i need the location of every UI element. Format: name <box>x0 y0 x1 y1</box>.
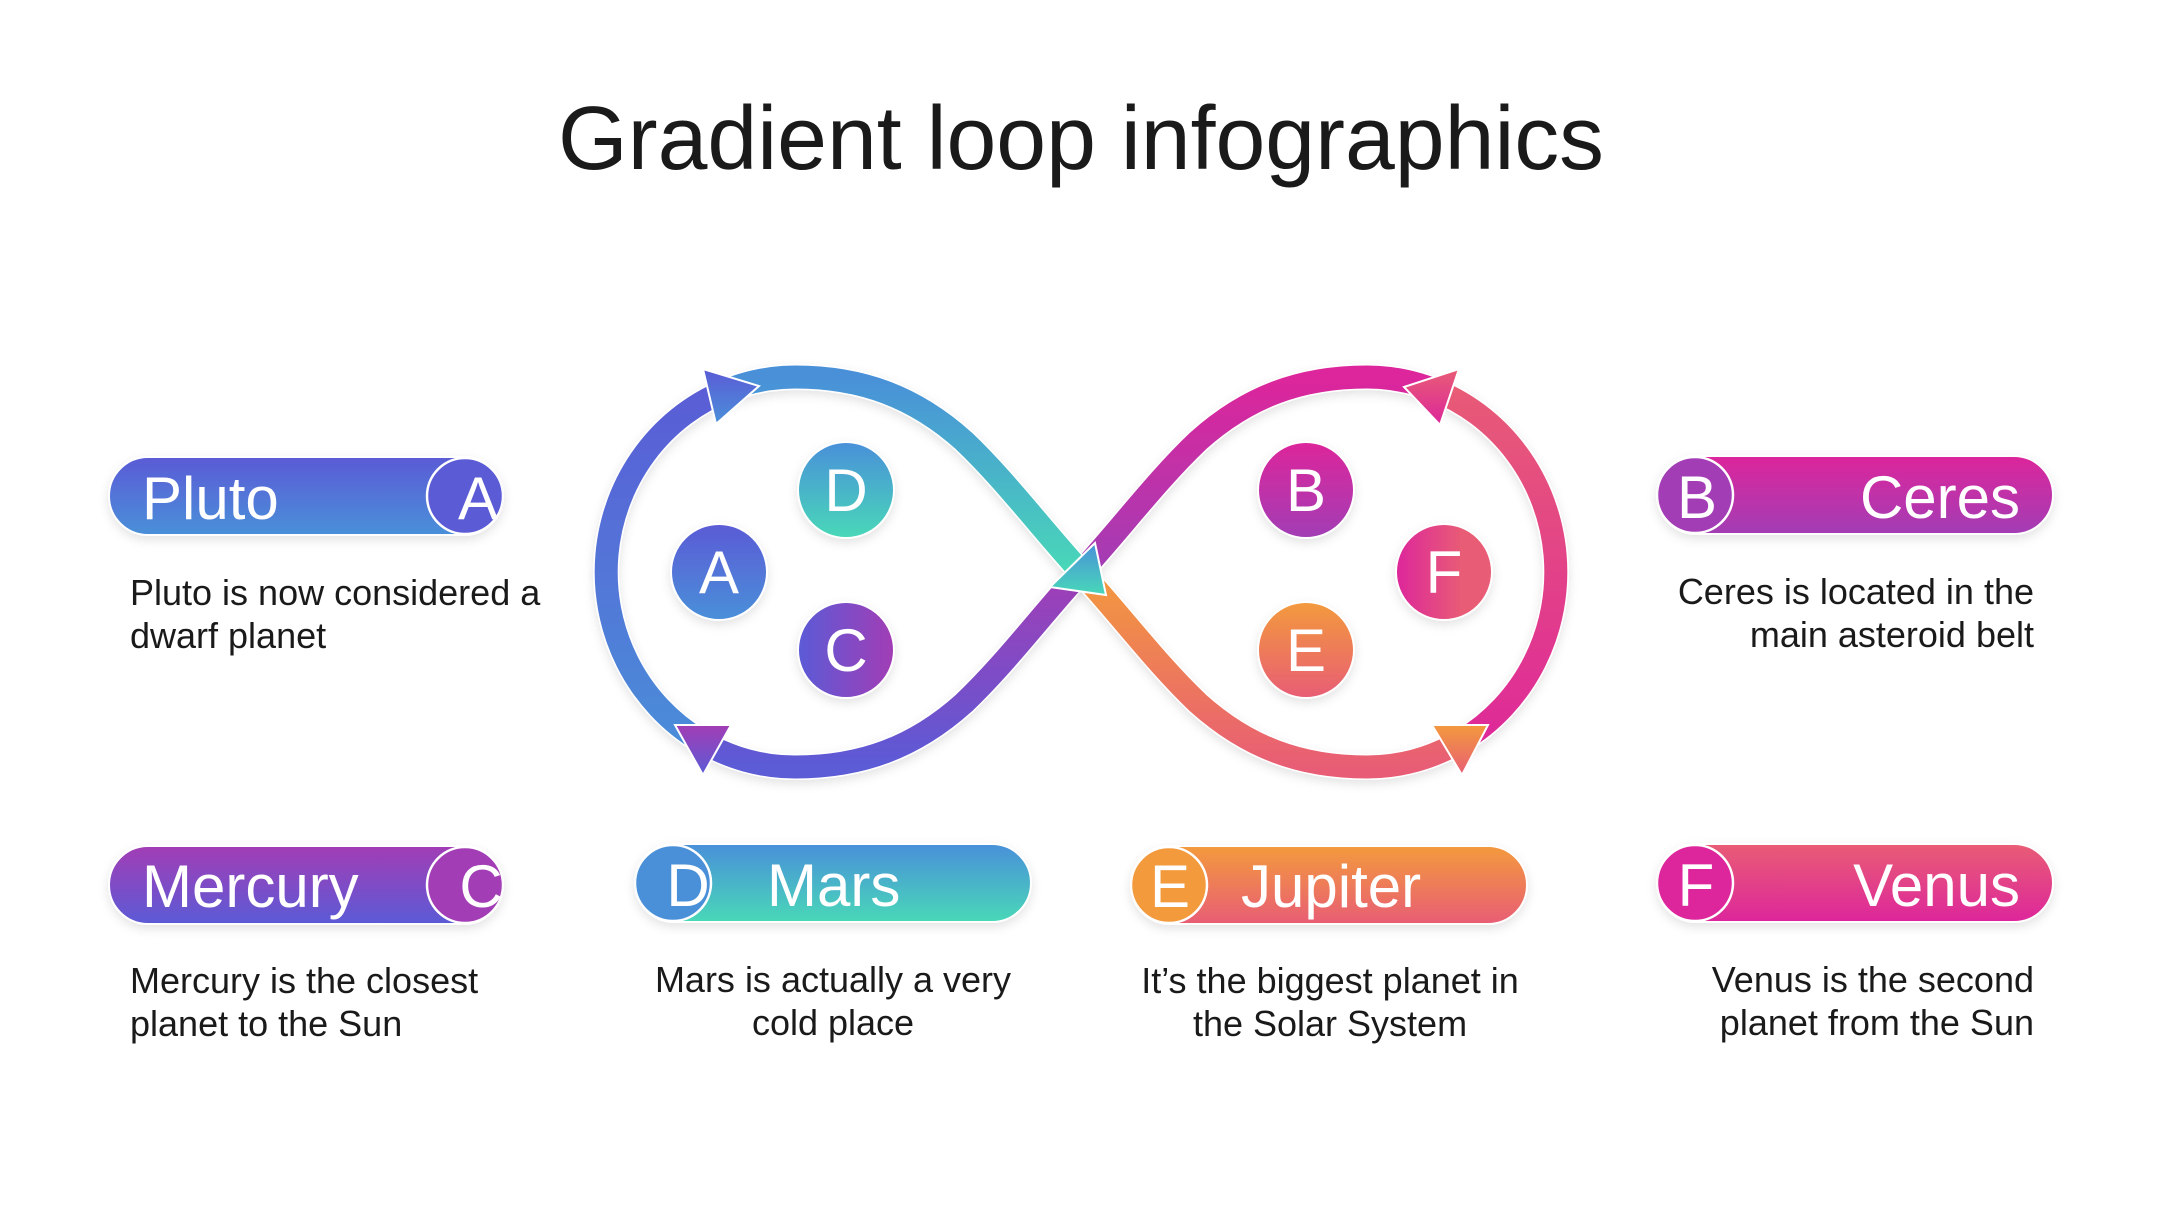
description: Venus: Venus is the second <box>1712 959 2034 1000</box>
pill: Ceres: Ceres <box>1860 464 2020 531</box>
pill: Pluto <box>109 457 503 535</box>
description: Pluto: Pluto is now considered a <box>130 572 541 613</box>
description: Venus: planet from the Sun <box>1720 1002 2034 1043</box>
panel: Jupiter <box>1131 846 1527 1044</box>
circle C <box>798 602 894 698</box>
loop segment: top left teal arc <box>730 377 1081 572</box>
circle B: B <box>1286 457 1326 524</box>
pill: Mars <box>635 844 1031 922</box>
description: Ceres: Ceres is located in the <box>1678 571 2034 612</box>
circle F <box>1396 524 1492 620</box>
circle C: C <box>824 617 868 684</box>
circle A <box>671 524 767 620</box>
description: Mars: Mars is actually a very <box>655 959 1011 1000</box>
loop segment: left blue arc <box>606 389 730 740</box>
pill: Jupiter <box>1131 846 1527 924</box>
panel: Mars <box>635 844 1031 1043</box>
loop segment: bottom left purple arc <box>700 572 1081 767</box>
circle E: E <box>1286 617 1326 684</box>
arrowhead: bottom left <box>675 725 731 775</box>
circle E <box>1258 602 1354 698</box>
title: Gradient loop infographics <box>558 88 1604 188</box>
pill: Mercury: Mercury <box>142 853 359 920</box>
description: Pluto: dwarf planet <box>130 615 326 656</box>
infinity loop diagram <box>606 369 1556 775</box>
circle D: D <box>824 457 868 524</box>
circle B <box>1258 442 1354 538</box>
pill: Venus: Venus <box>1853 852 2020 919</box>
panel: Venus <box>1657 844 2053 1043</box>
panel: Pluto <box>109 457 541 656</box>
arrowhead: top right <box>1404 369 1459 425</box>
pill: Mercury <box>109 846 503 924</box>
panel: Mercury <box>109 846 503 1044</box>
arrowhead: top left <box>703 369 759 424</box>
description: Ceres: main asteroid belt <box>1750 614 2034 655</box>
circle D <box>798 442 894 538</box>
loop segment: bottom right orange arc <box>1081 572 1462 767</box>
pill: Ceres: B <box>1677 464 1717 531</box>
description: Mercury: Mercury is the closest <box>130 960 478 1001</box>
pill: Venus: F <box>1678 852 1714 919</box>
pill: Mars: Mars <box>767 852 900 919</box>
circle A: A <box>699 539 739 606</box>
description: Mercury: planet to the Sun <box>130 1003 402 1044</box>
pill: Jupiter: E <box>1150 853 1190 920</box>
panel: Ceres <box>1657 456 2053 655</box>
arrowhead: bottom right <box>1432 725 1488 775</box>
pill: Mercury: C <box>459 853 503 920</box>
description: Jupiter: It’s the biggest planet in <box>1141 960 1519 1001</box>
pill: Pluto: A <box>458 465 498 532</box>
circle F: F <box>1426 539 1462 606</box>
arrowhead: center <box>1050 543 1106 595</box>
description: Jupiter: the Solar System <box>1193 1003 1467 1044</box>
pill: Venus <box>1657 844 2053 922</box>
pill: Ceres <box>1657 456 2053 534</box>
pill: Mars: D <box>666 852 710 919</box>
loop segment: top right magenta arc <box>1081 377 1432 572</box>
description: Mars: cold place <box>752 1002 914 1043</box>
pill: Pluto: Pluto <box>142 465 279 532</box>
pill: Jupiter: Jupiter <box>1241 853 1421 920</box>
loop segment: right pink arc <box>1432 389 1556 740</box>
